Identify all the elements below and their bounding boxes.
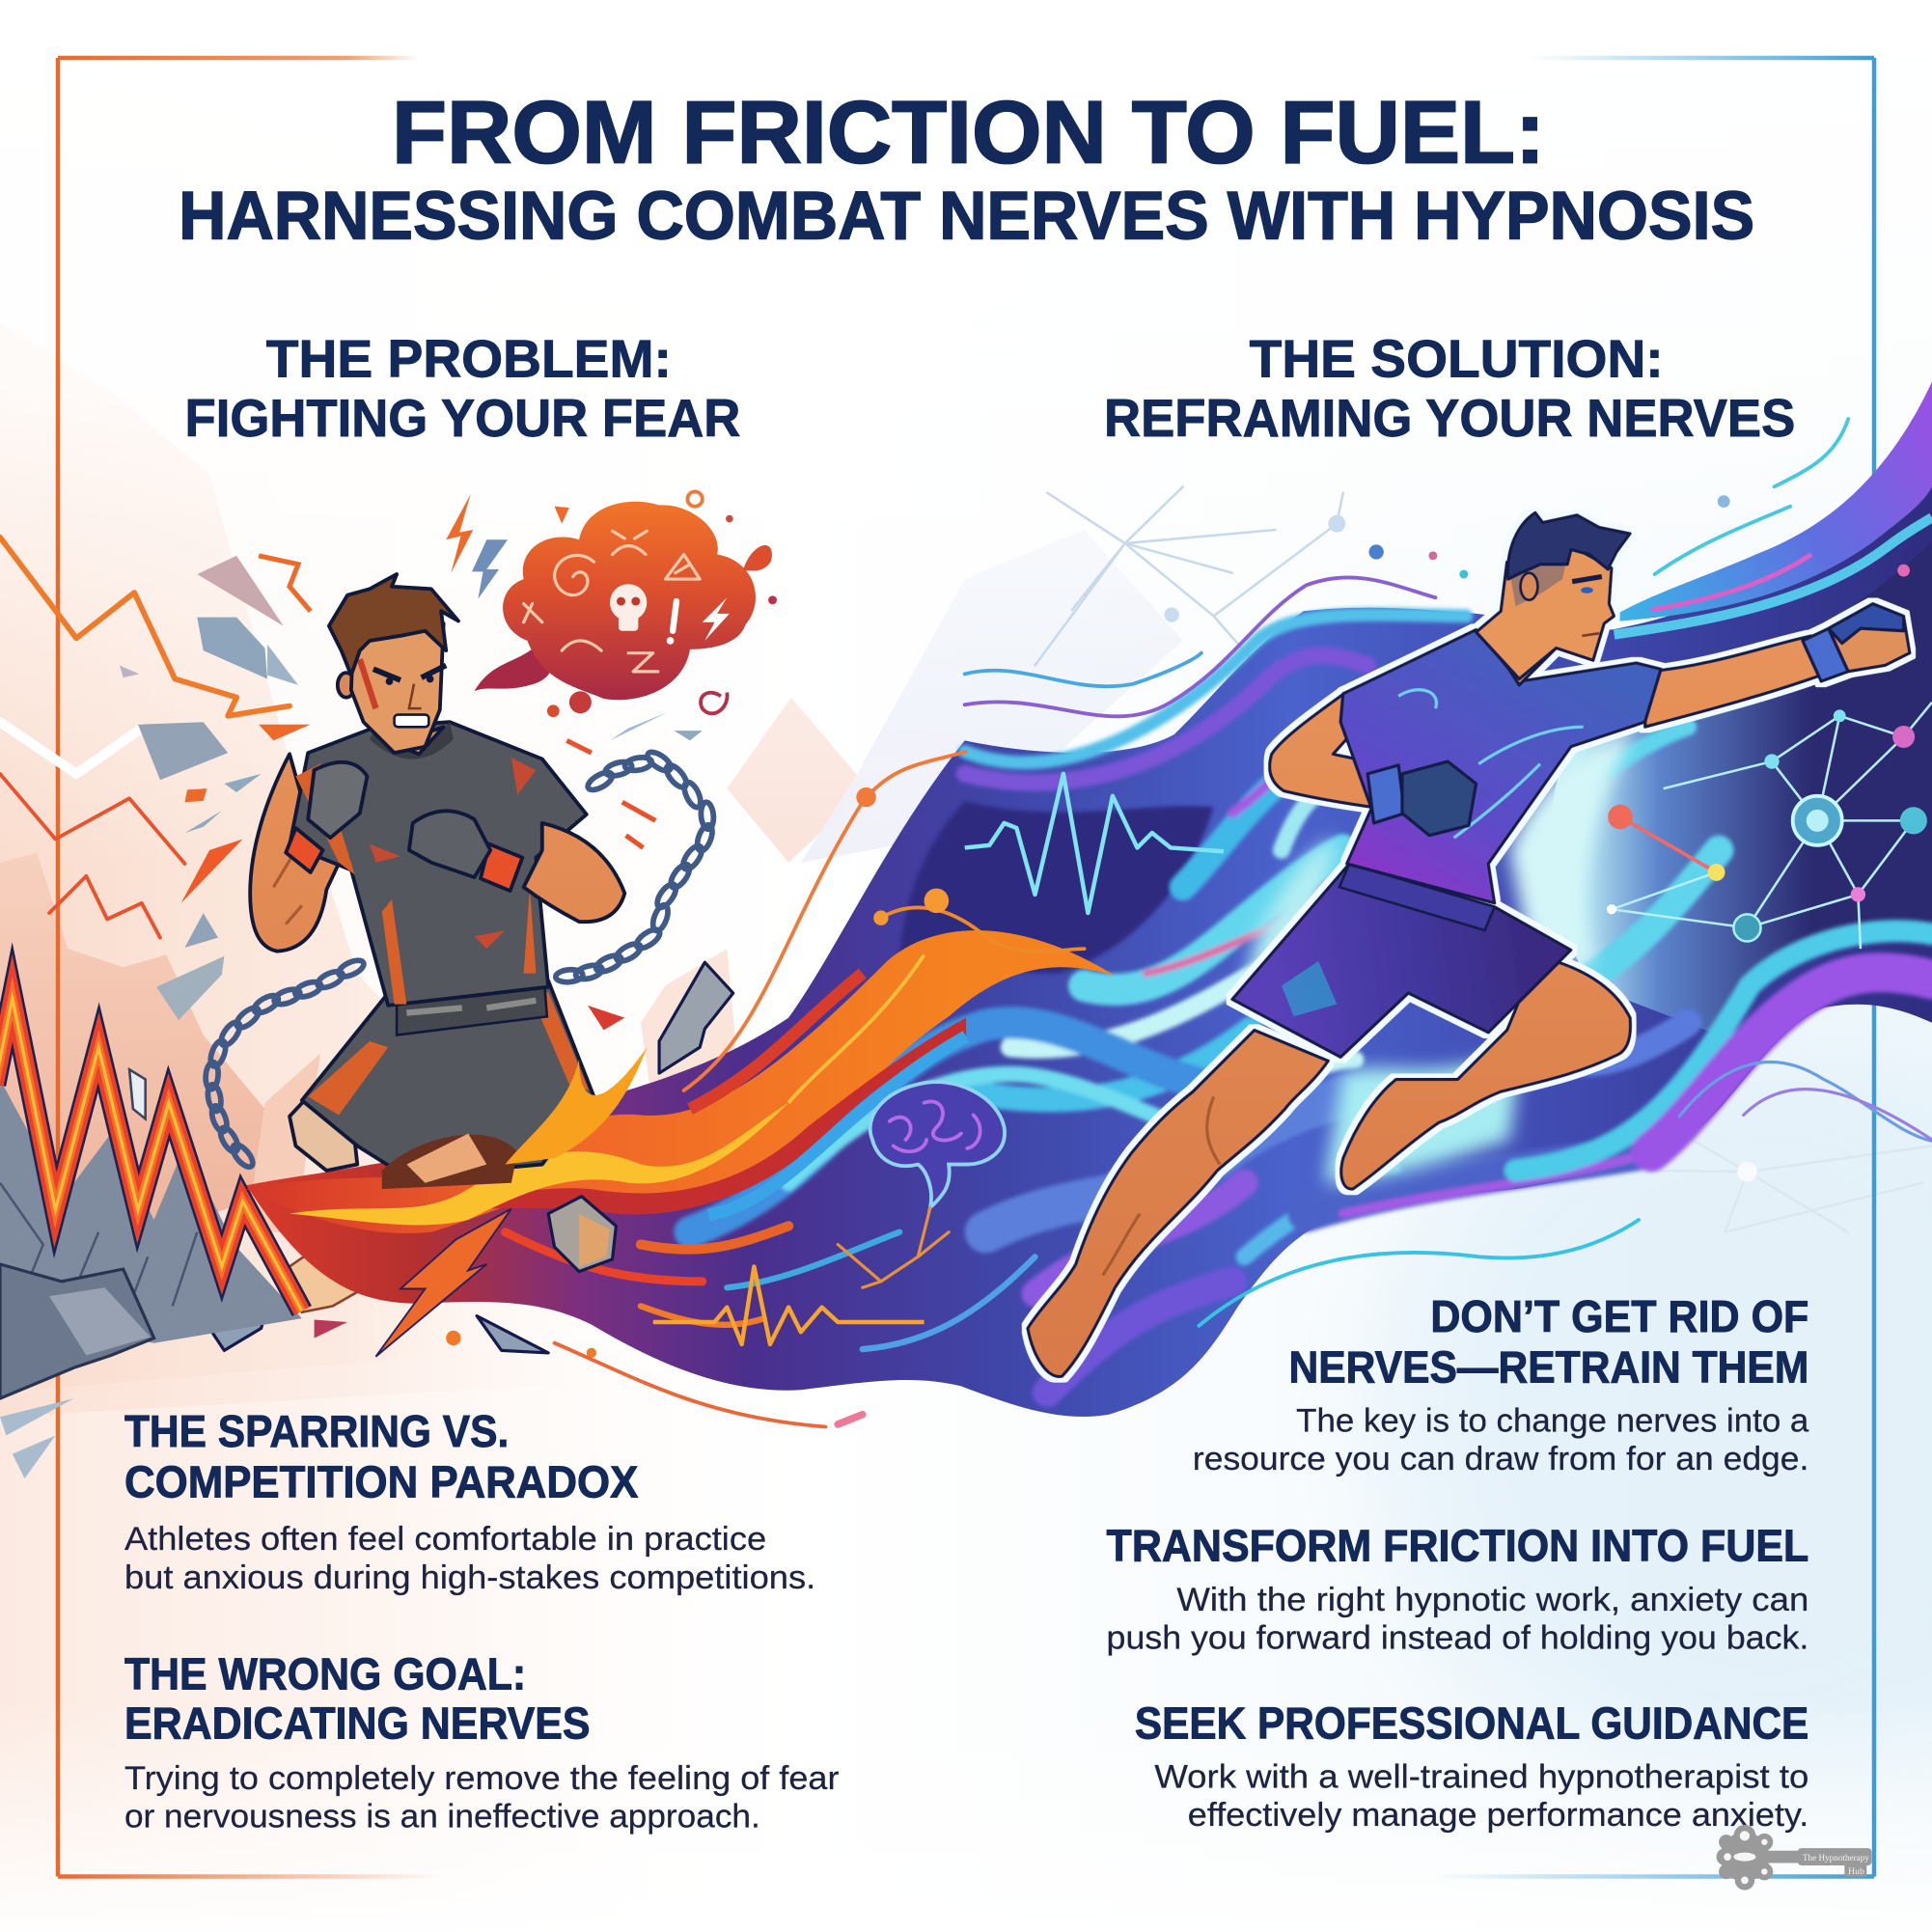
icon: lightning bolts [446,494,508,599]
icon: spiral and symbols [524,531,700,672]
heading: the problem: THE PROBLEM: [266,329,672,389]
text: don't get rid of nerves: NERVES—RETRAIN THEM [1289,1342,1808,1393]
text: transform friction into fuel: TRANSFORM FRICTION INTO FUEL [1107,1521,1808,1571]
fighter: struggling with fear [250,574,647,1189]
shorts [1232,864,1571,1057]
back arm [1270,693,1380,809]
punching arm [1645,636,1821,727]
neural background [1550,542,1932,1035]
central dark panel [899,801,1214,974]
rear glove [1367,765,1405,823]
watermark: key logo: The Hypnotherapy [1803,1853,1869,1863]
pulse line: cyan [965,774,1224,913]
title: FROM FRICTION TO FUEL: [392,84,1545,182]
flames [246,930,1115,1233]
text: the wrong goal: THE WRONG GOAL: [124,1648,526,1698]
text: sparring vs competition paradox: Athletes often feel comfortable in practice [124,1521,766,1558]
debris shards [0,556,703,1478]
neural network [1607,565,1932,949]
text: the wrong goal: ERADICATING NERVES [124,1698,591,1749]
pulse line: orange [653,1267,925,1344]
text: transform friction into fuel: push you forward instead of holding you back. [1107,1619,1808,1656]
heading: the problem: FIGHTING YOUR FEAR [185,388,740,448]
watermark: key logo [1717,1825,1871,1891]
heading: the solution: REFRAMING YOUR NERVES [1104,388,1795,448]
broken chains [205,749,715,1170]
hair [1507,512,1630,579]
shirt [1340,629,1661,903]
neck [1485,631,1557,685]
text: don't get rid of nerves [1193,1291,1809,1477]
icon: brain [838,1082,1005,1287]
thought cloud [475,491,777,717]
text: don't get rid of nerves: resource you can draw from for an edge. [1193,1441,1808,1477]
gloves [308,762,367,838]
text: sparring vs competition paradox: THE SPARRING VS. [124,1406,509,1456]
title [179,84,1754,254]
legs [290,1096,357,1171]
wrist bands [286,828,323,872]
text: the wrong goal [124,1648,839,1835]
rock and shard [375,962,733,1357]
heading: the solution: THE SOLUTION: [1250,329,1664,389]
left arm [250,754,345,952]
flame tips over fighter [505,1047,647,1165]
heading: the solution [1104,329,1795,448]
left zigzag lines [0,538,290,938]
debris burst [382,1135,517,1189]
text: seek professional guidance [1135,1698,1808,1834]
icon: skull [610,584,647,631]
text: seek professional guidance: effectively manage performance anxiety. [1188,1797,1808,1834]
text: don't get rid of nerves: DON’T GET RID OF [1430,1291,1808,1341]
heading: the problem [185,329,740,448]
neck [367,715,444,754]
text: sparring vs competition paradox [124,1406,815,1596]
blue and cyan streams [690,615,1932,1393]
hair [329,574,458,676]
pale glow around runner [1245,733,1633,1183]
text: don't get rid of nerves: The key is to change nerves into a [1296,1403,1809,1440]
front glove [1803,628,1848,681]
front leg [1341,956,1631,1189]
watermark: key logo: Hub [1848,1866,1864,1877]
lower dark streaks [505,1226,1035,1349]
text: the wrong goal: or nervousness is an ineffective approach. [124,1798,760,1835]
title: HARNESSING COMBAT NERVES WITH HYPNOSIS [179,178,1754,254]
thin accent lines with nodes [555,419,1932,1427]
runner: powered by energy [1028,512,1910,1377]
ear [338,673,355,698]
jagged stress chart and rocks [0,998,375,1398]
text: transform friction into fuel [1107,1521,1808,1656]
shirt [290,722,587,1006]
text: seek professional guidance: Work with a well-trained hypnotherapist to [1154,1759,1808,1796]
face [351,623,444,753]
top-right swoosh [1604,382,1932,622]
text: sparring vs competition paradox: COMPETITION PARADOX [124,1456,639,1506]
face [1477,546,1615,679]
energy flow band [246,382,1932,1417]
background network lines [1035,486,1932,1232]
shorts [302,980,593,1176]
text: transform friction into fuel: With the right hypnotic work, anxiety can [1176,1582,1808,1618]
text: the wrong goal: Trying to completely remove the feeling of fear [124,1760,839,1797]
text: sparring vs competition paradox: but anxious during high-stakes competitions. [124,1559,815,1596]
back leg [1028,1030,1328,1377]
right arm [524,823,624,922]
text: seek professional guidance: SEEK PROFESSIONAL GUIDANCE [1135,1698,1808,1749]
